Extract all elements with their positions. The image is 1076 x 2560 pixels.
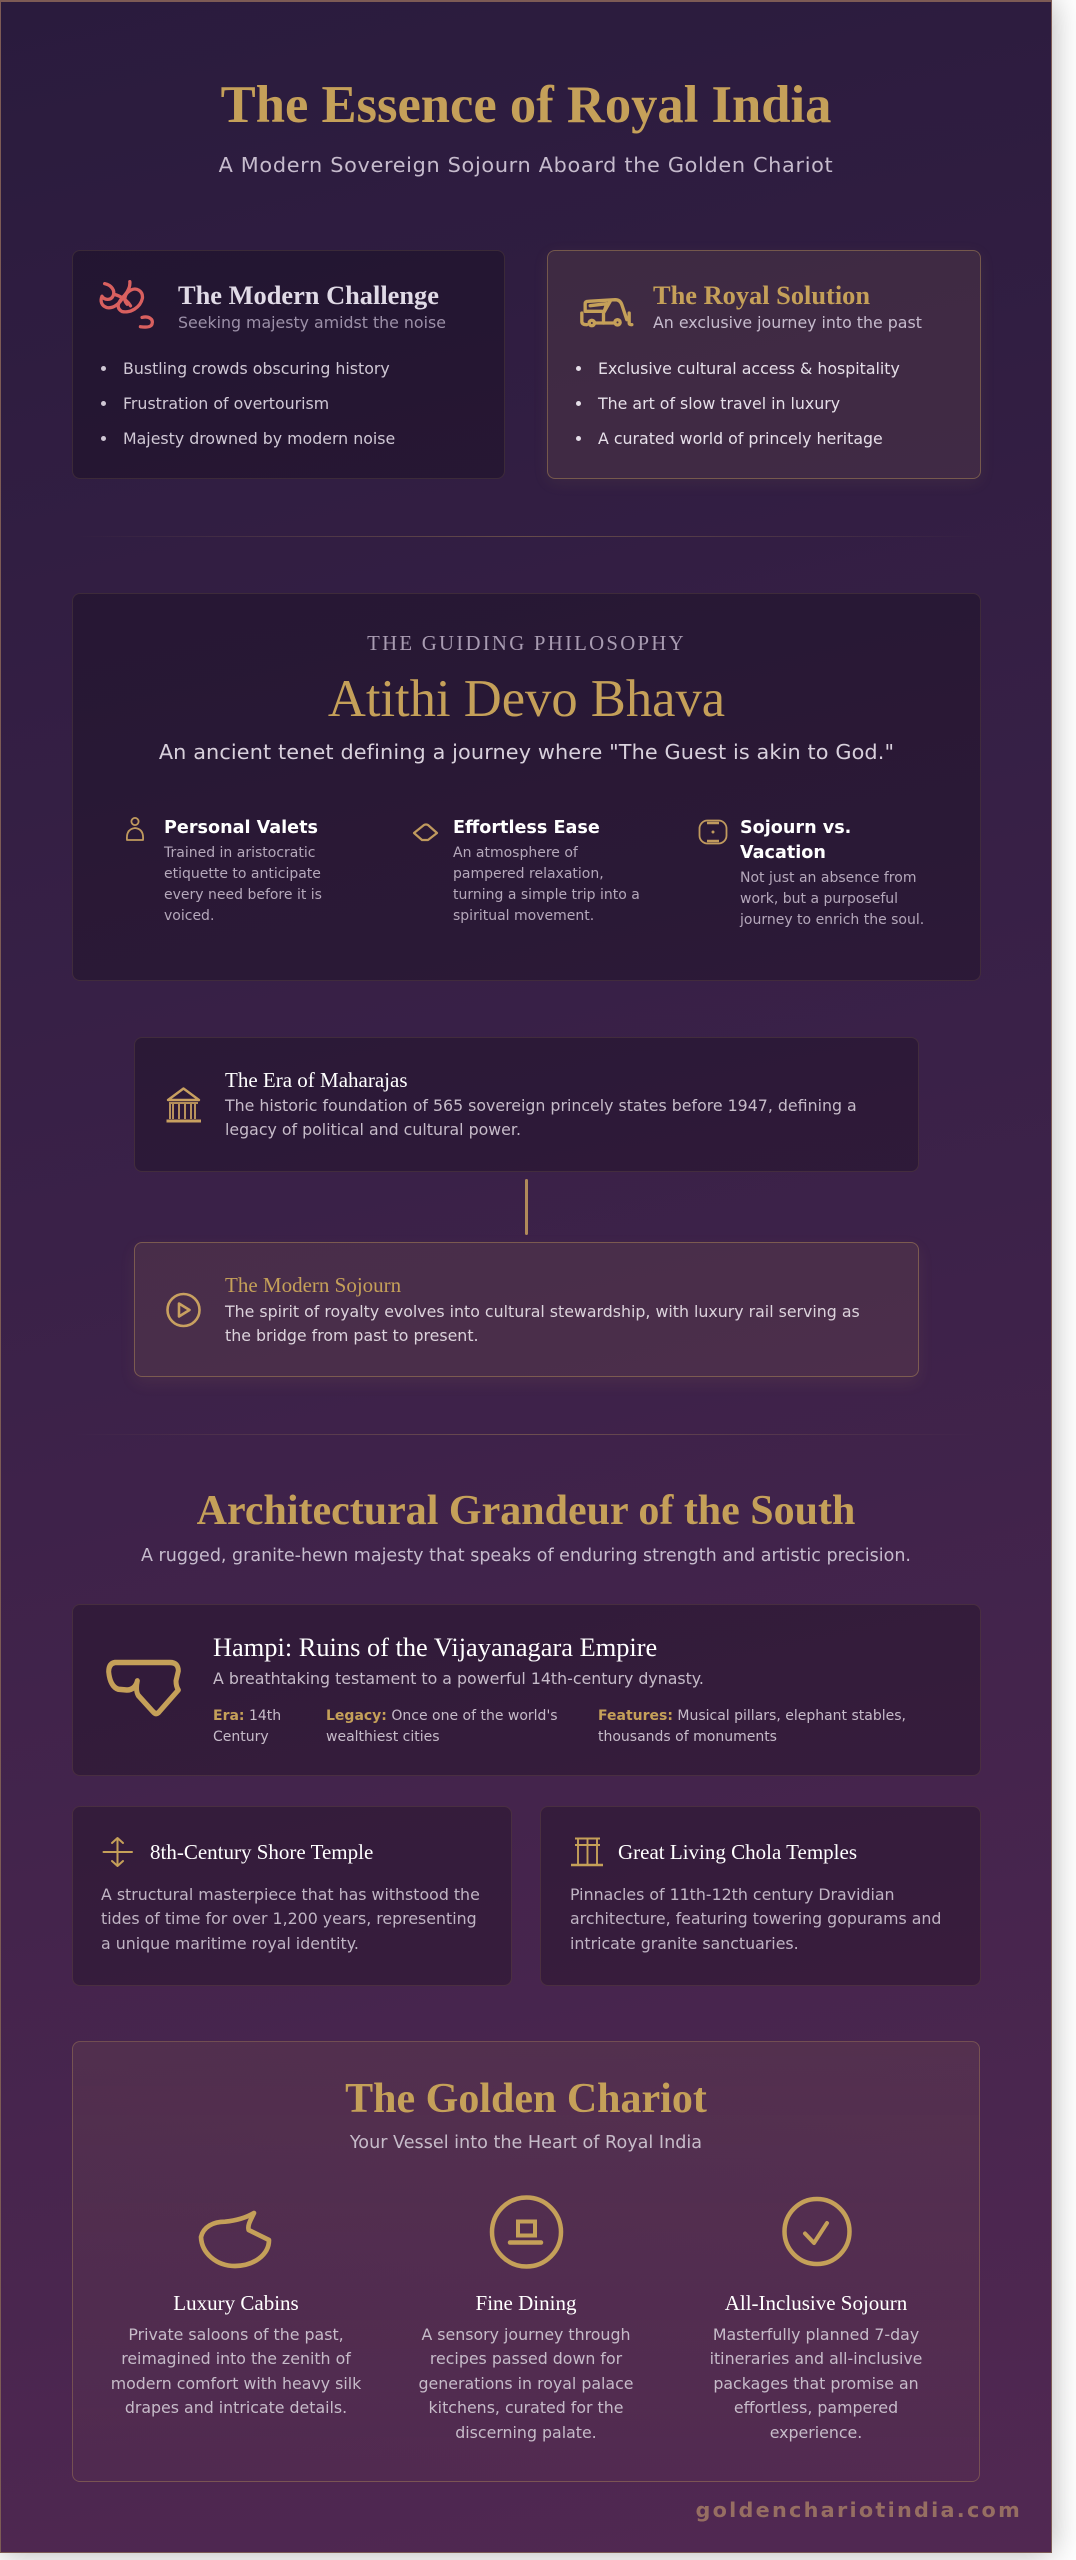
fact: features (598, 1708, 906, 1744)
item heading: Vacation (740, 842, 826, 862)
item text: Trained in aristocratic (164, 844, 315, 860)
arrow: connector line (525, 1179, 528, 1235)
list of solutions: The art of slow travel in luxury (598, 394, 840, 413)
panel: hampi (72, 1604, 981, 1776)
icon: tide arrows (102, 1837, 133, 1867)
subtitle: A Modern Sovereign Sojourn Aboard the Golden Chariot (219, 153, 833, 177)
list of solutions: Exclusive cultural access & hospitality (598, 359, 900, 378)
list of challenges: Frustration of overtourism (123, 394, 329, 413)
description: a unique maritime royal identity. (101, 1934, 359, 1953)
item heading: Luxury Cabins (173, 2291, 299, 2315)
item text (740, 870, 924, 928)
fact: features: Features: Musical pillars, elephant stables, (598, 1708, 906, 1724)
icon: play circle (166, 1292, 201, 1328)
heading: The Modern Challenge (178, 280, 439, 310)
list of solutions (576, 359, 900, 448)
item text: journey to enrich the soul. (740, 912, 924, 928)
list of solutions: A curated world of princely heritage (598, 429, 883, 448)
column: fine dining (418, 2195, 634, 2442)
item text: An atmosphere of (453, 844, 578, 860)
subheading: Seeking majesty amidst the noise (178, 313, 446, 332)
heading: Hampi: Ruins of the Vijayanagara Empire (213, 1632, 657, 1662)
list of challenges: Bustling crowds obscuring history (123, 359, 390, 378)
subheading: An exclusive journey into the past (653, 313, 922, 332)
description (570, 1885, 941, 1953)
panel: the modern challenge (72, 250, 505, 479)
item text (164, 844, 322, 924)
description: legacy of political and cultural power. (225, 1120, 521, 1139)
column: sojourn vs vacation (698, 818, 924, 928)
heading: The Era of Maharajas (225, 1068, 408, 1092)
heading: The Modern Sojourn (225, 1273, 401, 1297)
description: The historic foundation of 565 sovereign princely states before 1947, defining a (225, 1096, 857, 1115)
description: Pinnacles of 11th-12th century Dravidian (570, 1885, 895, 1904)
fact: era: Century (213, 1728, 269, 1744)
panel: shore temple (72, 1806, 512, 1986)
panel: the modern sojourn (134, 1242, 919, 1377)
item text: kitchens, curated for the (429, 2398, 623, 2417)
column: effortless ease (412, 818, 640, 924)
fact: era: Era: 14th (213, 1708, 281, 1724)
item text: voiced. (164, 908, 214, 924)
subheading: Your Vessel into the Heart of Royal India (350, 2133, 702, 2153)
section subheading: A rugged, granite-hewn majesty that speaks of enduring strength and artistic precision. (141, 1546, 911, 1566)
heading: The Royal Solution (653, 280, 870, 310)
item text: Private saloons of the past, (128, 2325, 344, 2344)
item text: work, but a purposeful (740, 890, 898, 906)
item heading (740, 818, 851, 862)
item text: Not just an absence from (740, 870, 916, 886)
item text: A sensory journey through (421, 2325, 630, 2344)
item text (418, 2325, 634, 2442)
item text: pampered relaxation, (453, 866, 604, 882)
item text: drapes and intricate details. (125, 2398, 347, 2417)
panel: the golden chariot (72, 2041, 980, 2482)
item heading: Sojourn vs. (740, 818, 851, 838)
description: A breathtaking testament to a powerful 14th-century dynasty. (213, 1669, 704, 1688)
list of challenges: Majesty drowned by modern noise (123, 429, 395, 448)
fact: features: thousands of monuments (598, 1728, 777, 1744)
description (224, 1302, 860, 1345)
description (101, 1885, 480, 1953)
description (224, 1096, 857, 1139)
fact: era (213, 1708, 281, 1744)
item text: effortless, pampered (734, 2398, 898, 2417)
item heading: Fine Dining (476, 2291, 576, 2315)
item text: experience. (770, 2423, 862, 2442)
description: The spirit of royalty evolves into cultural stewardship, with luxury rail serving as (225, 1302, 860, 1321)
section heading: Architectural Grandeur of the South (197, 1488, 855, 1534)
icon: cabin (198, 2210, 272, 2268)
eyebrow label: THE GUIDING PHILOSOPHY (367, 632, 686, 655)
item text: generations in royal palace (418, 2374, 634, 2393)
description: architecture, featuring towering gopurams and (570, 1909, 941, 1928)
philosophy description: An ancient tenet defining a journey where "The Guest is akin to God." (159, 740, 894, 764)
icon: check circle (782, 2196, 852, 2266)
item text (710, 2325, 922, 2442)
icon: person (126, 817, 144, 841)
panel: the royal solution (547, 250, 981, 479)
fact: legacy: wealthiest cities (326, 1728, 440, 1744)
footer website: goldenchariotindia.com (695, 2498, 1022, 2522)
icon: ruin stone (106, 1660, 181, 1716)
heading: Great Living Chola Temples (618, 1840, 857, 1864)
title: The Essence of Royal India (221, 76, 831, 134)
panel: guiding philosophy (72, 593, 981, 981)
heading: The Golden Chariot (345, 2076, 707, 2122)
item text: turning a simple trip into a (453, 886, 640, 902)
description: the bridge from past to present. (225, 1326, 479, 1345)
philosophy name: Atithi Devo Bhava (328, 670, 725, 728)
fact: legacy (326, 1708, 558, 1744)
panel: era of maharajas (134, 1037, 919, 1172)
item heading: Personal Valets (164, 818, 318, 838)
list of challenges (101, 359, 395, 448)
icon: dining plate (490, 2195, 564, 2269)
item text: reimagined into the zenith of (121, 2349, 351, 2368)
item text: every need before it is (164, 886, 322, 902)
item text: packages that promise an (713, 2374, 919, 2393)
item text: Masterfully planned 7-day (713, 2325, 919, 2344)
item text (453, 844, 640, 924)
item text (111, 2325, 362, 2417)
column: luxury cabins (111, 2210, 362, 2417)
column: personal valets (126, 817, 322, 924)
item text: spiritual movement. (453, 908, 594, 924)
icon: temple (166, 1087, 201, 1122)
icon: flame (100, 280, 154, 329)
item text: recipes passed down for (430, 2349, 622, 2368)
icon: gopuram (571, 1838, 603, 1866)
heading: 8th-Century Shore Temple (150, 1840, 373, 1864)
item text: itineraries and all-inclusive (710, 2349, 922, 2368)
column: all-inclusive sojourn (710, 2196, 922, 2442)
item text: modern comfort with heavy silk (111, 2374, 361, 2393)
description: tides of time for over 1,200 years, representing (101, 1909, 477, 1928)
item text: etiquette to anticipate (164, 866, 321, 882)
item text: discerning palate. (455, 2423, 597, 2442)
icon: watch (698, 820, 728, 844)
fact: legacy: Legacy: Once one of the world's (326, 1708, 558, 1724)
description: A structural masterpiece that has withstood the (101, 1885, 480, 1904)
description: intricate granite sanctuaries. (570, 1934, 799, 1953)
panel: chola temples (540, 1806, 981, 1986)
icon: diamond (412, 823, 438, 842)
item heading: Effortless Ease (453, 818, 600, 838)
item heading: All-Inclusive Sojourn (725, 2291, 907, 2315)
icon: chariot (580, 298, 634, 328)
